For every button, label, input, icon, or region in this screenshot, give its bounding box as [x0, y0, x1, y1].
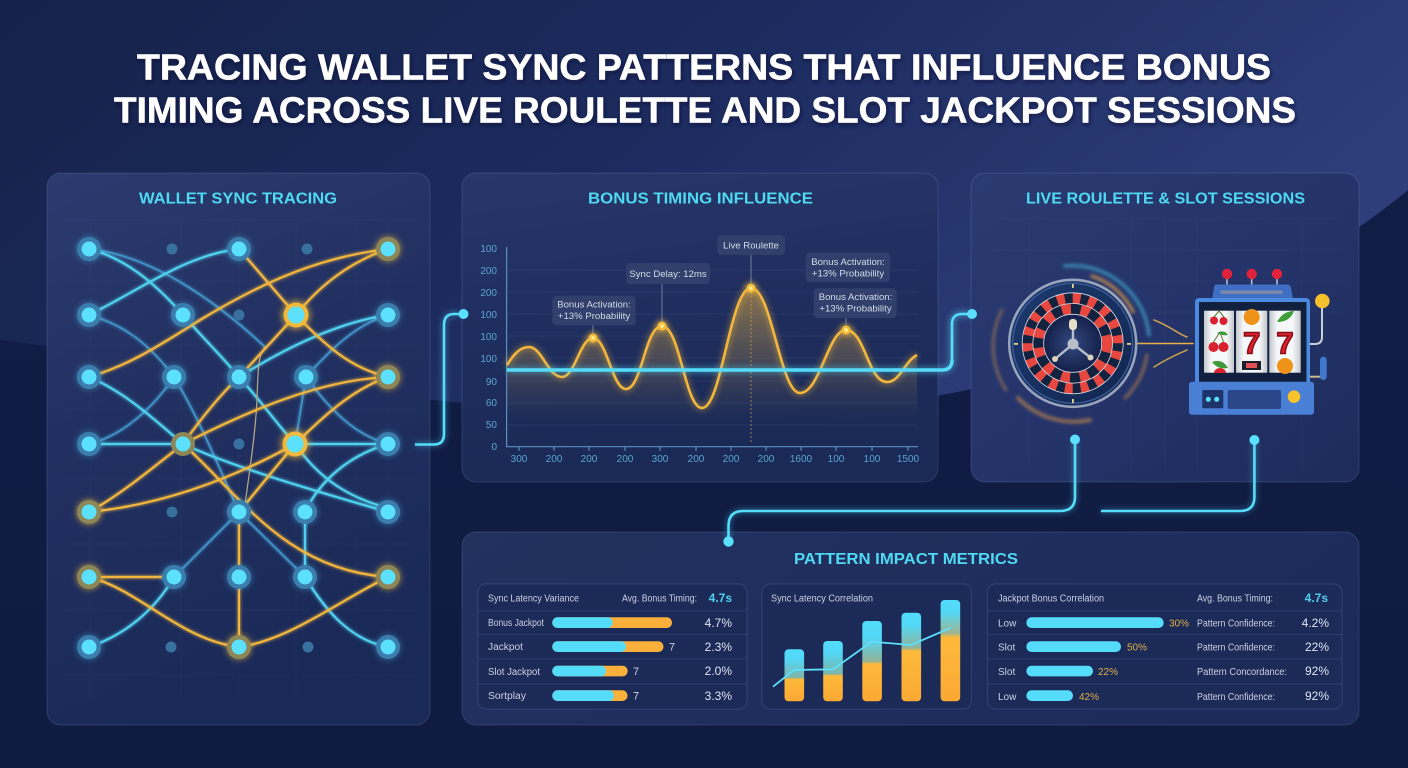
top box	[1212, 284, 1293, 299]
callout: bonus activation left: +13% Probability	[558, 311, 630, 322]
table: jackpot bonus correlation: Slot	[998, 667, 1015, 678]
callout: sync delay: Sync Delay: 12ms	[629, 269, 707, 280]
y axis labels: 100	[480, 310, 497, 321]
columns	[784, 600, 960, 701]
cyan edges	[89, 249, 388, 647]
y axis labels: 100	[480, 354, 497, 365]
wheel pockets	[1028, 298, 1118, 388]
title: TIMING ACROSS LIVE ROULETTE AND SLOT JACKPOT SESSIONS	[114, 90, 1296, 131]
network graph	[76, 236, 401, 660]
peak markers	[587, 282, 852, 344]
table: jackpot bonus correlation: 42%	[1079, 692, 1099, 703]
beams to slot machine	[1138, 320, 1193, 367]
table: jackpot bonus correlation: 92%	[1305, 689, 1329, 703]
table: sync latency variance: 4.7%	[705, 616, 732, 630]
gold-ring nodes	[76, 236, 401, 660]
yellow edges	[89, 249, 388, 647]
callout leaders	[593, 255, 846, 338]
panel: wallet sync tracing	[47, 173, 430, 725]
callout: bonus activation lower right: Bonus Activation:	[819, 292, 892, 303]
icon: slot machine	[1189, 269, 1330, 415]
y axis labels: 50	[486, 420, 497, 431]
y axis labels: 100	[480, 244, 497, 255]
knobs	[1227, 278, 1277, 285]
table: jackpot bonus correlation: 30%	[1169, 618, 1189, 630]
y axis labels: 200	[480, 288, 497, 299]
table: sync latency variance: 7	[633, 666, 639, 678]
table: sync latency variance: 4.7s	[709, 591, 732, 605]
callout: live roulette: Live Roulette	[723, 240, 779, 252]
y axis labels: 100	[480, 332, 497, 343]
table: jackpot bonus correlation	[988, 584, 1342, 709]
heading: bonus timing influence: BONUS TIMING INFLUENCE	[588, 190, 813, 207]
table: jackpot bonus correlation: Low	[998, 618, 1017, 630]
x axis labels: 100	[864, 454, 881, 465]
lever	[1309, 306, 1322, 344]
arrow: roulette to metrics	[723, 434, 1080, 547]
y axis labels	[480, 244, 497, 453]
y axis labels: 0	[491, 442, 497, 453]
x axis labels: 200	[581, 454, 598, 465]
heading: live roulette and slot sessions: LIVE ROULETTE & SLOT SESSIONS	[1026, 190, 1305, 207]
panel: live roulette and slot sessions	[971, 173, 1359, 482]
callout: bonus activation upper right	[806, 253, 890, 282]
table: sync latency variance: Avg. Bonus Timing:	[622, 594, 697, 604]
icon: roulette wheel	[993, 266, 1193, 422]
table: sync latency variance: 2.3%	[705, 640, 732, 654]
x axis labels: 200	[688, 454, 705, 465]
table: sync latency variance: Sortplay	[488, 691, 526, 702]
table: sync latency variance	[478, 584, 747, 709]
y axis labels: 200	[480, 266, 497, 277]
x axis labels: 1500	[897, 454, 920, 465]
table: sync latency variance: Sync Latency Variance	[488, 594, 579, 604]
callout: bonus activation left	[552, 296, 636, 325]
dim edges	[89, 249, 388, 577]
chart: sync latency correlation	[762, 584, 971, 709]
table: jackpot bonus correlation: 22%	[1305, 640, 1329, 654]
callout: bonus activation upper right: Bonus Activation:	[811, 257, 885, 268]
small dots	[166, 244, 314, 652]
heading: pattern impact metrics: PATTERN IMPACT METRICS	[794, 551, 1018, 568]
title	[114, 46, 1296, 131]
y axis labels: 60	[486, 398, 497, 409]
x axis labels: 300	[511, 454, 528, 465]
connectors	[415, 309, 1259, 547]
reel symbols: 7	[1276, 325, 1294, 360]
table: sync latency variance: Jackpot	[488, 642, 523, 653]
ticks	[1014, 284, 1131, 403]
reel symbols: 7	[1243, 325, 1260, 360]
callout: bonus activation lower right: +13% Probability	[819, 304, 892, 314]
callout: bonus activation upper right: +13% Probability	[812, 268, 884, 280]
arrow: chart baseline to sessions panel	[507, 309, 977, 370]
table: jackpot bonus correlation: Avg. Bonus Timing:	[1197, 594, 1273, 604]
x axis labels: 200	[723, 454, 740, 465]
chart: sync latency correlation: Sync Latency Correlation	[771, 594, 873, 604]
cabinet	[1195, 298, 1310, 385]
x axis labels: 1600	[790, 454, 813, 465]
table: jackpot bonus correlation: 92%	[1305, 664, 1329, 678]
table: sync latency variance: Slot Jackpot	[488, 667, 540, 678]
axes	[507, 247, 918, 451]
table: jackpot bonus correlation: 4.2%	[1302, 616, 1329, 630]
heading: wallet sync tracing: WALLET SYNC TRACING	[139, 190, 337, 207]
table: jackpot bonus correlation: Jackpot Bonus Correlation	[998, 594, 1104, 604]
table: jackpot bonus correlation: Pattern Confidence:	[1197, 618, 1275, 630]
bars	[1026, 617, 1164, 701]
title: TRACING WALLET SYNC PATTERNS THAT INFLUENCE BONUS	[137, 46, 1271, 88]
reels	[1204, 311, 1234, 373]
x axis labels: 200	[758, 454, 775, 465]
x axis labels	[511, 454, 920, 465]
y axis labels: 90	[486, 377, 497, 388]
bars	[552, 617, 672, 701]
base	[1189, 382, 1314, 415]
table: jackpot bonus correlation: Low	[998, 692, 1017, 703]
table: sync latency variance: Bonus Jackpot	[488, 618, 544, 629]
node cores	[82, 242, 396, 654]
x axis labels: 100	[828, 454, 845, 465]
arrow: slot machine to metrics	[1101, 435, 1259, 511]
table: jackpot bonus correlation: Pattern Confidence:	[1197, 642, 1275, 654]
x axis labels: 300	[652, 454, 669, 465]
x axis labels: 200	[546, 454, 563, 465]
table: sync latency variance: 7	[633, 690, 639, 702]
panel: bonus timing influence	[462, 173, 938, 482]
line chart	[480, 235, 920, 465]
table: jackpot bonus correlation: 4.7s	[1305, 591, 1328, 605]
spokes	[1055, 324, 1090, 359]
callout: sync delay	[626, 263, 710, 284]
table: jackpot bonus correlation: 50%	[1127, 642, 1147, 654]
trend line	[773, 628, 951, 687]
table: sync latency variance: 3.3%	[705, 689, 732, 703]
callout: bonus activation left: Bonus Activation:	[557, 300, 631, 310]
timing curve	[507, 288, 917, 408]
motion swirls	[993, 266, 1149, 422]
table: jackpot bonus correlation: 22%	[1098, 667, 1118, 678]
table: jackpot bonus correlation: Slot	[998, 642, 1015, 654]
arrow: wallet panel to chart	[415, 309, 468, 444]
table: sync latency variance: 2.0%	[705, 664, 732, 678]
x axis labels: 200	[617, 454, 634, 465]
callout: bonus activation lower right	[814, 288, 897, 318]
dashed peak marker	[750, 288, 752, 443]
table: jackpot bonus correlation: Pattern Confidence:	[1197, 692, 1275, 703]
reel symbols	[1208, 309, 1294, 374]
panel: pattern impact metrics	[462, 532, 1359, 725]
callout: live roulette	[717, 235, 785, 255]
cyan nodes	[76, 236, 401, 660]
table: jackpot bonus correlation: Pattern Concordance:	[1197, 667, 1287, 678]
table: sync latency variance: 7	[669, 642, 675, 654]
thin tan edge	[245, 347, 265, 505]
area under curve	[507, 288, 917, 420]
